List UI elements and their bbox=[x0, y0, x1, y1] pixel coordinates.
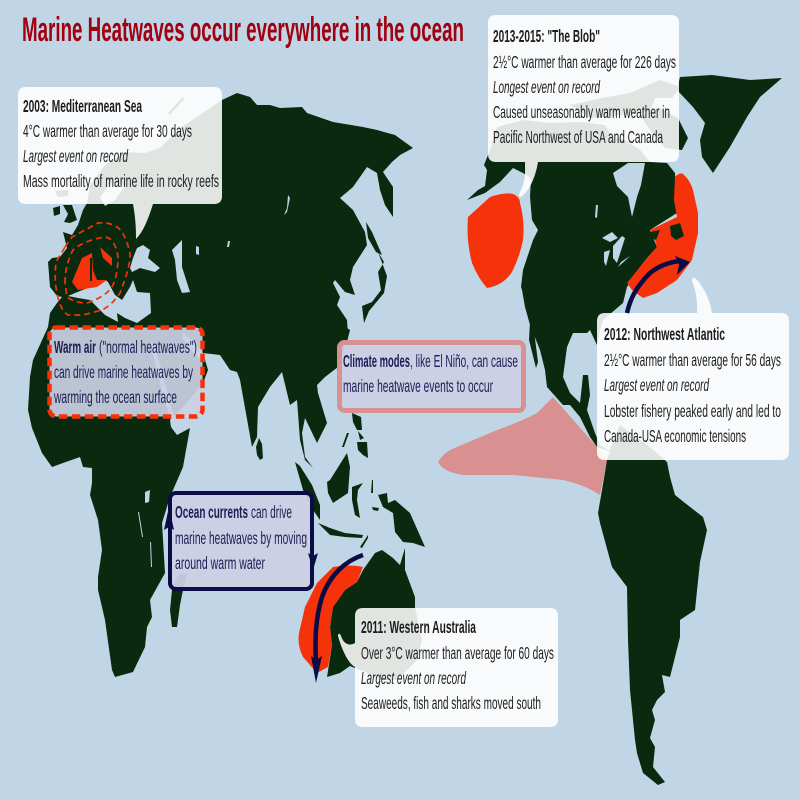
marine heatwave patch: The Blob bbox=[468, 193, 524, 288]
driver box: Ocean currents bbox=[164, 493, 318, 589]
arrow: Northwest Atlantic current bbox=[627, 256, 690, 313]
driver box: Warm air: Warm air bbox=[54, 337, 96, 357]
driver box: Warm air: ("normal heatwaves") bbox=[99, 337, 197, 357]
callout: 2011 Western Australia: Over 3°C warmer than average for 60 days bbox=[361, 643, 554, 663]
map: islands of the Old World bbox=[53, 97, 387, 460]
driver box: Ocean currents: marine heatwaves by moving bbox=[175, 528, 307, 548]
callout: 2003 Mediterranean Sea: Mass mortality of marine life in rocky reefs bbox=[23, 171, 219, 191]
driver box: Ocean currents: can drive bbox=[251, 502, 292, 522]
driver box: Warm air bbox=[50, 328, 202, 416]
callout: 2003 Mediterranean Sea: 2003: Mediterranean Sea bbox=[23, 96, 142, 116]
map: North and Central America bbox=[467, 120, 677, 452]
callout: 2011 Western Australia bbox=[338, 608, 558, 727]
map: Southeast Asia and New Guinea bbox=[295, 413, 425, 548]
callout: 2013-2015 The Blob: Pacific Northwest of USA and Canada bbox=[493, 127, 663, 147]
callout: 2013-2015 The Blob: 2½°C warmer than average for 226 days bbox=[493, 52, 676, 72]
map: Australia bbox=[327, 548, 422, 680]
callout: 2012 Northwest Atlantic: Largest event on record bbox=[604, 375, 710, 395]
driver box: Climate modes: , like El Niño, can cause bbox=[410, 351, 518, 371]
driver box: Climate modes bbox=[340, 342, 524, 410]
map: Madagascar bbox=[170, 573, 187, 627]
callout: 2003 Mediterranean Sea: Largest event on record bbox=[23, 146, 129, 166]
driver box: Climate modes: Climate modes bbox=[343, 351, 410, 371]
callout: 2003 Mediterranean Sea bbox=[18, 87, 222, 239]
callout: 2013-2015 The Blob: 2013-2015: "The Blob" bbox=[493, 26, 600, 46]
marine heatwave patch: Mediterranean bbox=[55, 223, 130, 315]
callout: 2013-2015 The Blob: Caused unseasonably warm weather in bbox=[493, 102, 670, 122]
callout: 2011 Western Australia: 2011: Western Australia bbox=[361, 617, 476, 637]
marine heatwave patch: Northwest Atlantic bbox=[627, 173, 698, 298]
driver box: Warm air: can drive marine heatwaves by bbox=[54, 362, 193, 382]
driver box: Climate modes: marine heatwave events to occur bbox=[343, 376, 493, 396]
marine heatwave patch: Western Australia bbox=[298, 566, 363, 673]
map: Greenland bbox=[677, 75, 782, 173]
callout: 2011 Western Australia: Largest event on record bbox=[361, 668, 467, 688]
arrow: up on left border bbox=[164, 507, 174, 530]
driver box: Ocean currents: around warm water bbox=[175, 553, 265, 573]
map: Hudson Bay and Great Lakes bbox=[595, 163, 645, 267]
map: Eurasia and Africa bbox=[28, 93, 413, 677]
driver box: Warm air: warming the ocean surface bbox=[53, 387, 177, 407]
map: inland seas and lakes bbox=[100, 182, 290, 567]
callout: 2013-2015 The Blob: Longest event on record bbox=[493, 77, 601, 97]
driver box: Ocean currents: Ocean currents bbox=[175, 502, 248, 522]
arrow: down on right border bbox=[308, 553, 318, 570]
map: El Nino pink region bbox=[438, 397, 607, 495]
map: Mediterranean Sea bbox=[68, 280, 151, 323]
map: Canadian Arctic islands bbox=[570, 80, 688, 150]
arrow: Leeuwin current Western Australia bbox=[311, 555, 363, 683]
callout: 2011 Western Australia: Seaweeds, fish and sharks moved south bbox=[361, 693, 541, 713]
callout: 2003 Mediterranean Sea: 4°C warmer than average for 30 days bbox=[23, 121, 192, 141]
map: South America bbox=[598, 425, 707, 785]
callout: 2013-2015 The Blob bbox=[488, 15, 679, 197]
callout: 2012 Northwest Atlantic bbox=[597, 278, 789, 460]
